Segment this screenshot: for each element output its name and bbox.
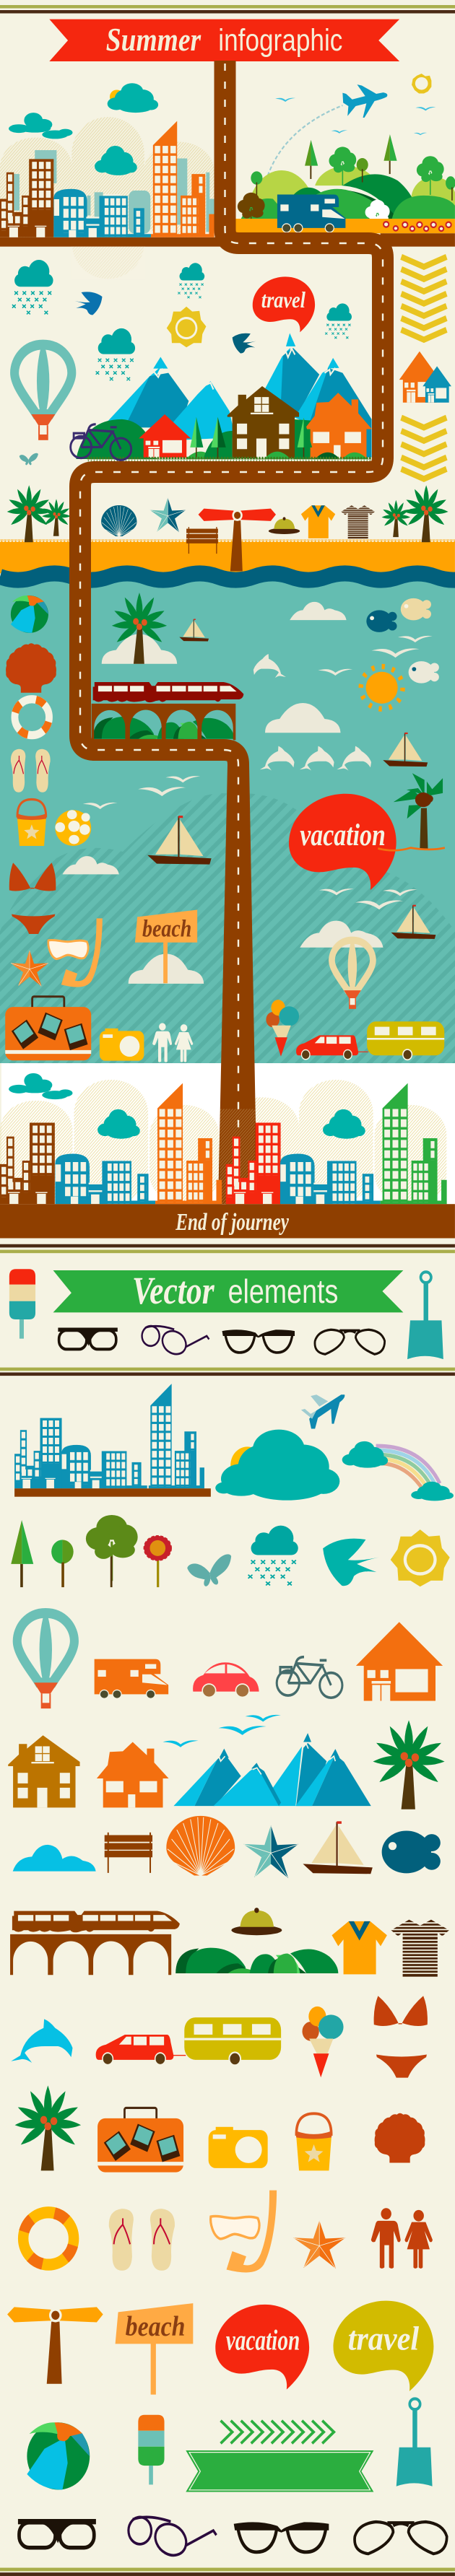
palm vector bbox=[373, 1720, 445, 1809]
people bbox=[152, 1023, 193, 1062]
title banner bbox=[49, 19, 399, 61]
top city back towers bbox=[13, 150, 214, 234]
chevron arrows bbox=[221, 2421, 334, 2443]
travel bubble vector bbox=[333, 2301, 433, 2391]
right road bar bbox=[381, 233, 455, 247]
bottom city red bbox=[226, 1123, 281, 1204]
flip flops bbox=[11, 749, 51, 793]
fish vector bbox=[382, 1831, 441, 1873]
island cloud bbox=[102, 634, 177, 664]
bench vector bbox=[105, 1833, 152, 1873]
snorkel bbox=[48, 918, 103, 987]
gulls bbox=[275, 98, 436, 135]
dolphin vector bbox=[11, 2019, 72, 2063]
flower bbox=[144, 1536, 171, 1587]
viaduct vector bbox=[10, 1934, 171, 1975]
dolphins bbox=[254, 654, 371, 771]
road bbox=[80, 61, 383, 1204]
end of journey bar bbox=[0, 1204, 455, 1239]
beach sand bbox=[0, 540, 455, 573]
bottom hatch hills bbox=[0, 1080, 446, 1204]
faint hatch on road bbox=[220, 1109, 255, 1204]
bottom stripes bbox=[0, 2568, 455, 2576]
pine trees valley bbox=[190, 417, 312, 459]
flip flops vector bbox=[109, 2209, 175, 2271]
shirt striped bbox=[341, 505, 375, 538]
gulls bbox=[83, 636, 433, 909]
icon: blue swallow bbox=[75, 292, 103, 315]
small boat bbox=[179, 619, 209, 642]
shovel vector bbox=[396, 2398, 433, 2487]
bottom city blue right bbox=[280, 1153, 381, 1204]
icon: navy swallow bbox=[233, 333, 256, 354]
bottom city blue left bbox=[55, 1153, 155, 1204]
camper vector bbox=[95, 1659, 168, 1698]
grass strip bbox=[87, 457, 372, 461]
top city backdrop hatch hills bbox=[0, 117, 214, 279]
small houses bbox=[399, 352, 451, 403]
train vector bbox=[12, 1911, 180, 1932]
end of journey bar: End of journey bbox=[175, 1208, 290, 1235]
signpost bbox=[199, 509, 276, 571]
glasses 2 bbox=[139, 1322, 209, 1358]
rain cloud vector bbox=[248, 1526, 298, 1585]
ring vector bbox=[23, 2212, 74, 2265]
sand strip bbox=[235, 219, 455, 233]
boats bbox=[147, 733, 436, 939]
top city buildings blue bbox=[53, 189, 151, 237]
fade of hatch below ground bar bbox=[71, 247, 145, 280]
dotted ball bbox=[55, 810, 91, 846]
star orange bbox=[11, 950, 48, 987]
ice cream bbox=[266, 1000, 299, 1057]
star teal bbox=[150, 498, 186, 532]
shrubs bbox=[264, 452, 368, 459]
title banner: Summer bbox=[106, 22, 202, 58]
bikini bbox=[9, 863, 56, 934]
travel bubble bbox=[253, 276, 315, 332]
icon: sun bbox=[167, 307, 206, 347]
bottom city green bbox=[381, 1083, 447, 1204]
palm vector 2 bbox=[14, 2085, 81, 2170]
orange house bbox=[304, 393, 372, 458]
beach sign: beach bbox=[142, 915, 191, 942]
beach sign vector bbox=[116, 2303, 193, 2395]
camper van bbox=[277, 195, 345, 232]
ring bbox=[14, 699, 49, 735]
top city clouds bbox=[9, 83, 158, 175]
rain cloud 3 bbox=[325, 303, 352, 339]
blob tree bbox=[86, 1515, 138, 1587]
hat bbox=[269, 517, 300, 534]
round tree bbox=[51, 1540, 74, 1587]
wagon and caravan bbox=[296, 1021, 444, 1060]
top city ground bar bbox=[0, 237, 221, 247]
arch bushes bbox=[93, 717, 234, 739]
bench bbox=[186, 527, 218, 554]
trees bbox=[238, 134, 455, 235]
car coral bbox=[193, 1662, 259, 1697]
rain cloud 4 bbox=[96, 328, 135, 380]
mountains vector bbox=[173, 1733, 371, 1806]
hot air balloon vector bbox=[17, 1608, 74, 1708]
train on viaduct bbox=[93, 682, 243, 702]
title banner: infographic bbox=[218, 24, 342, 57]
icon: butterfly bbox=[20, 453, 38, 465]
palm on island bbox=[112, 593, 167, 664]
shovel bbox=[407, 1272, 443, 1359]
shell vector bbox=[166, 1816, 235, 1876]
suitcase vector bbox=[98, 2108, 183, 2173]
divider stripes bbox=[0, 1368, 455, 1376]
travel bubble vector: travel bbox=[348, 2320, 420, 2357]
white city backdrop bbox=[1, 1063, 455, 1205]
glasses 4 bbox=[315, 1330, 385, 1354]
beach palm left small bbox=[42, 499, 71, 536]
shell bbox=[6, 643, 56, 693]
big cloud and sun bbox=[215, 1430, 339, 1501]
bucket vector bbox=[296, 2113, 332, 2170]
icon: bicycle bbox=[71, 424, 131, 460]
brown house bbox=[228, 386, 299, 458]
popsicle vector bbox=[138, 2415, 165, 2484]
orange house bbox=[356, 1622, 443, 1701]
beach palm right small bbox=[381, 500, 410, 537]
mountains bbox=[99, 333, 372, 458]
ice cream vector bbox=[302, 2007, 344, 2077]
star vector bbox=[243, 1825, 298, 1878]
glasses 3 bbox=[222, 1330, 295, 1353]
clouds bbox=[62, 602, 383, 984]
sun vector bbox=[391, 1529, 450, 1586]
travel bubble: travel bbox=[261, 287, 306, 313]
shirt orange bbox=[301, 505, 335, 538]
vector elements banner: Vector bbox=[132, 1270, 215, 1313]
green ribbon bbox=[186, 2450, 373, 2492]
wave band bbox=[0, 573, 455, 580]
shell vector solid bbox=[375, 2113, 425, 2162]
vector elements banner bbox=[53, 1270, 403, 1313]
wind palm bbox=[394, 773, 443, 850]
beach palm right big bbox=[404, 485, 448, 542]
signpost vector bbox=[7, 2307, 103, 2384]
glasses vector 3 bbox=[234, 2522, 329, 2552]
bottom clouds bbox=[9, 1073, 365, 1139]
chevrons upper bbox=[402, 257, 446, 340]
glasses vector 2 bbox=[124, 2512, 217, 2561]
vector city bbox=[14, 1384, 211, 1497]
divider stripes bbox=[0, 1244, 455, 1253]
vacation bubble vector bbox=[215, 2305, 309, 2390]
green hills bbox=[241, 166, 455, 219]
vacation bubble: vacation bbox=[300, 818, 386, 852]
viaduct bbox=[92, 704, 235, 740]
rainbow and clouds bbox=[342, 1441, 454, 1501]
vacation bubble vector: vacation bbox=[226, 2325, 300, 2357]
bottom city orange bbox=[155, 1083, 222, 1204]
glasses vector 1 bbox=[18, 2519, 96, 2548]
bottom city brown bbox=[0, 1123, 55, 1204]
suitcase bbox=[5, 997, 91, 1060]
popsicle bbox=[9, 1269, 35, 1339]
chevrons lower bbox=[402, 418, 446, 479]
rain cloud 2 bbox=[178, 263, 204, 298]
orange sun bbox=[361, 666, 403, 709]
beach sign bbox=[135, 909, 197, 983]
top stripes bbox=[0, 5, 455, 13]
camera vector bbox=[209, 2127, 268, 2168]
bushes vector bbox=[176, 1948, 338, 1973]
cone tree bbox=[11, 1520, 33, 1587]
hot air balloon bbox=[14, 340, 72, 440]
red house bbox=[139, 414, 191, 458]
glasses 1 bbox=[58, 1328, 118, 1349]
shirt vector bbox=[332, 1921, 387, 1974]
navy fish bbox=[366, 610, 397, 632]
brown house vector bbox=[8, 1735, 80, 1807]
shell navy bbox=[101, 505, 136, 536]
bikini vector bbox=[374, 1996, 428, 2078]
sea balloon bbox=[332, 937, 373, 1009]
vacation bubble bbox=[289, 794, 396, 890]
gulls vector bbox=[162, 1715, 281, 1747]
snorkel vector bbox=[211, 2191, 277, 2272]
striped shirt vector bbox=[391, 1920, 449, 1977]
rain cloud 1 bbox=[12, 260, 53, 314]
plane vector bbox=[301, 1394, 344, 1429]
bicycle vector bbox=[277, 1657, 342, 1698]
swallow vector bbox=[323, 1539, 379, 1586]
hat vector bbox=[231, 1908, 282, 1935]
camera bbox=[100, 1029, 144, 1061]
sea panel bbox=[0, 581, 455, 1063]
orange wave line bbox=[378, 848, 445, 850]
cyan cloud bbox=[13, 1845, 96, 1872]
icon: plane bbox=[342, 84, 387, 118]
plane flight path bbox=[263, 105, 342, 194]
beach ball vector bbox=[27, 2422, 90, 2489]
top city buildings brown bbox=[0, 159, 53, 237]
wagon vector bbox=[96, 2017, 281, 2066]
top city buildings orange bbox=[151, 121, 214, 237]
valley hills bbox=[76, 419, 316, 459]
beach ball bbox=[11, 595, 48, 633]
icon: small sun bbox=[412, 74, 431, 93]
tan fish bbox=[401, 598, 431, 620]
beach sign vector: beach bbox=[126, 2312, 185, 2342]
orange house 2 bbox=[97, 1742, 169, 1807]
boat vector bbox=[303, 1821, 373, 1874]
butterfly bbox=[186, 1554, 235, 1589]
glasses vector 4 bbox=[355, 2522, 447, 2554]
flowers bbox=[384, 222, 451, 231]
beach palm left big bbox=[7, 485, 51, 542]
cream fish bbox=[409, 661, 439, 684]
people vector bbox=[371, 2208, 433, 2269]
bucket bbox=[17, 800, 46, 846]
vector elements banner: elements bbox=[228, 1274, 338, 1311]
starfish vector bbox=[293, 2220, 345, 2269]
